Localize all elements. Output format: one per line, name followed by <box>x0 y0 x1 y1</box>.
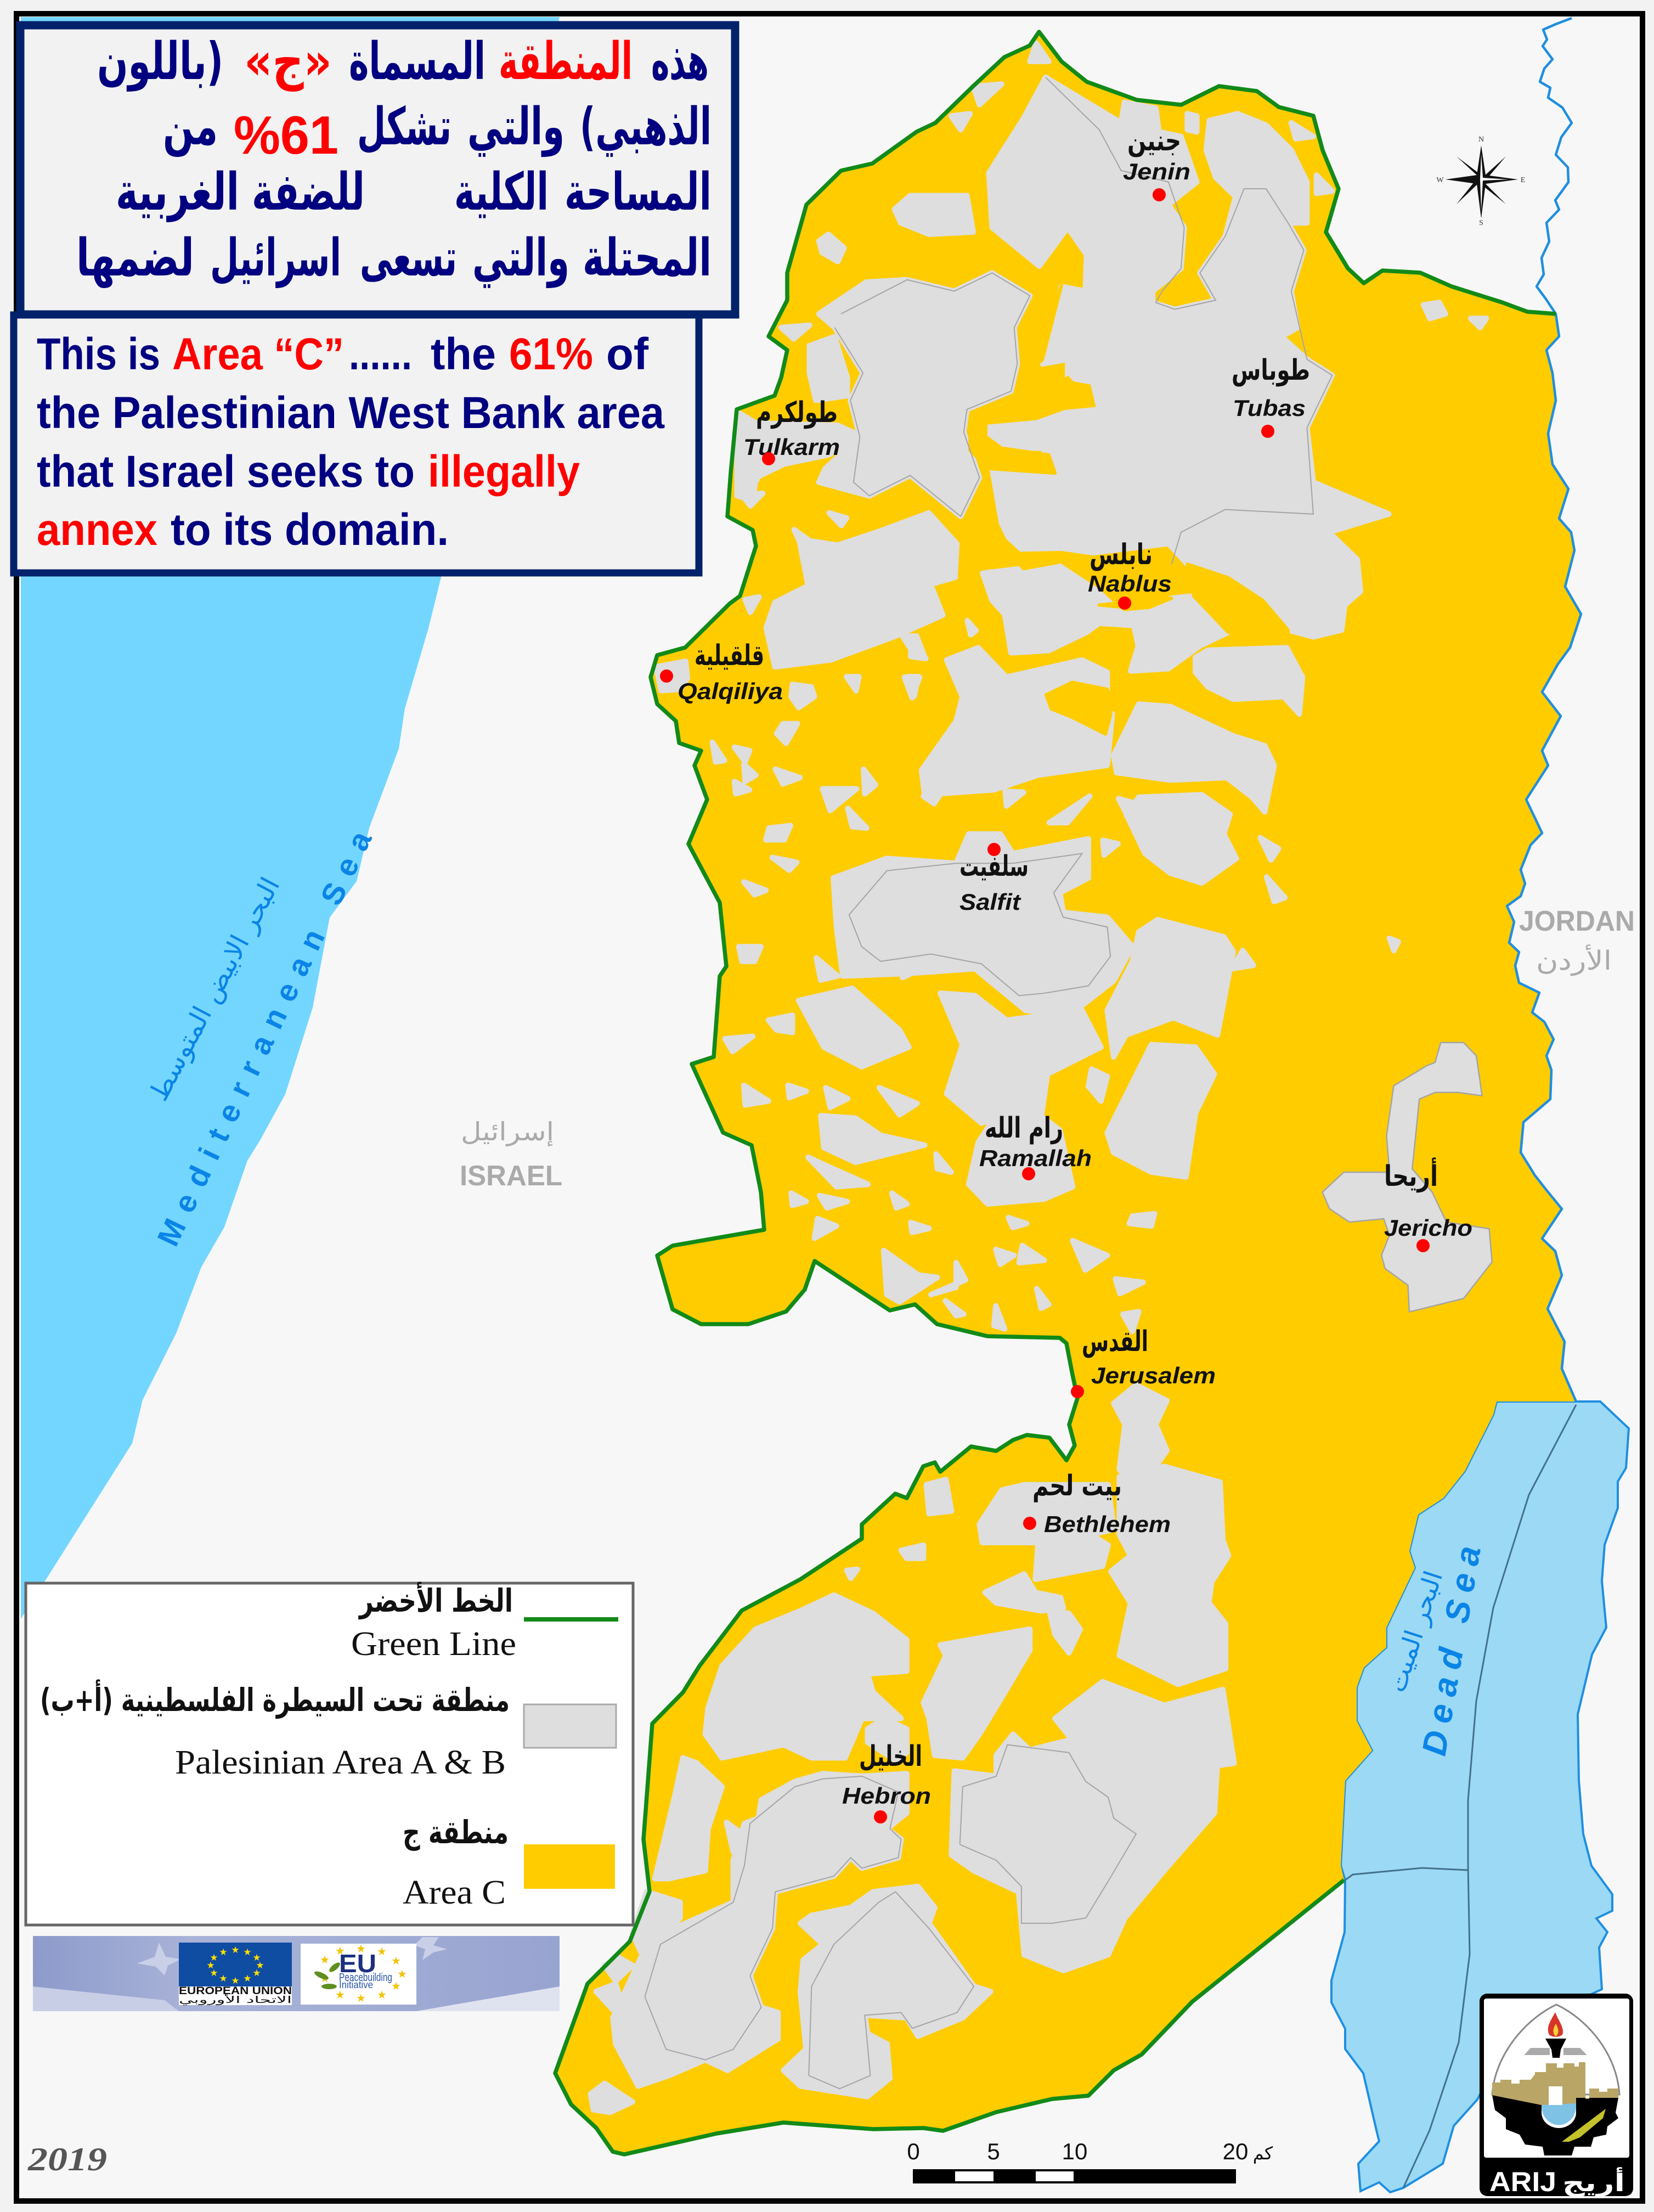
Arabic callout: الذهبي)‏ <box>580 97 712 157</box>
English callout: ...... <box>349 329 412 379</box>
Palestinian Area A and B, north-west <box>656 479 976 696</box>
compass rose: W <box>1436 176 1444 184</box>
EU flag: ★ <box>231 1945 240 1956</box>
label: Hebron <box>842 1740 931 1823</box>
Arabic callout: %61 <box>234 105 338 165</box>
label: Ramallah <box>979 1112 1092 1180</box>
label: Qalqiliya <box>660 639 783 705</box>
label: Jericho: Jericho <box>1384 1215 1472 1241</box>
Area C territory <box>555 32 1581 2154</box>
label: Dead Sea: Dead Sea <box>1415 1543 1488 1758</box>
scale bar: 20 <box>1223 2138 1248 2164</box>
EU flag: EUROPEAN UNION <box>179 1985 292 1997</box>
English callout: annex <box>37 505 157 555</box>
legend: Palestinian Area A and B <box>40 1679 616 1781</box>
Area C corridors through the north <box>970 286 1288 639</box>
scale bar <box>907 2138 1273 2183</box>
EU flag <box>179 1943 292 2006</box>
label: Bethlehem <box>1023 1470 1171 1537</box>
legend <box>26 1581 633 1925</box>
EU Peacebuilding Initiative logo: Initiative <box>339 1979 373 1990</box>
label: Israel <box>460 1117 562 1192</box>
scale bar: 0 <box>907 2138 920 2164</box>
Arabic callout: الكلية <box>454 162 549 222</box>
Dead Sea <box>1331 1402 1629 2192</box>
EU Peacebuilding Initiative logo: ★ <box>335 1988 345 2001</box>
EU flag: ★ <box>243 1973 252 1984</box>
Mediterranean Sea <box>21 17 560 1619</box>
EU Peacebuilding Initiative logo: ★ <box>377 1988 387 2001</box>
year: 2019 <box>27 2141 107 2177</box>
EU flag: ★ <box>252 1952 261 1963</box>
legend: Palestinian Area A and B: منطقة تحت السيطرة الفلسطينية (أ+ب)‏ <box>40 1679 510 1719</box>
EU flag: ★ <box>210 1952 218 1963</box>
compass rose: E <box>1521 176 1525 184</box>
English callout: the <box>431 329 496 379</box>
legend: Area C: Area C <box>403 1874 506 1911</box>
label: Salfit: Salfit <box>959 889 1021 915</box>
Arabic callout: ‏(باللون <box>97 32 223 92</box>
EU flag: ★ <box>210 1968 218 1979</box>
Arabic callout: والتي <box>472 228 569 288</box>
legend: Green Line <box>351 1581 618 1663</box>
EU flag: ★ <box>219 1973 228 1984</box>
legend: Area C: منطقة ج <box>403 1814 509 1851</box>
label: Mediterranean Sea: Mediterranean Sea <box>150 825 379 1251</box>
EU flag: ★ <box>231 1975 240 1986</box>
label: Qalqiliya: قلقيلية <box>695 639 764 672</box>
Arabic callout: تشكل <box>357 97 451 157</box>
label: Ramallah: رام الله <box>985 1112 1063 1145</box>
Arabic callout: الغربية <box>116 162 239 222</box>
compass rose: N <box>1478 136 1484 144</box>
label: Jerusalem: القدس <box>1082 1325 1148 1358</box>
English callout: Area “C” <box>172 329 344 379</box>
label: Bethlehem: بيت لحم <box>1032 1470 1122 1502</box>
Area C blob inside central enclave <box>1046 682 1111 734</box>
English callout: to its domain. <box>171 505 449 555</box>
scale bar: 5 <box>987 2138 1000 2164</box>
label: Salfit: سلفيت <box>959 850 1029 883</box>
EU Peacebuilding Initiative logo: ★ <box>391 1954 401 1967</box>
Arabic callout: والتي <box>467 97 564 157</box>
label: Tulkarm <box>743 396 840 465</box>
EU Peacebuilding Initiative logo: ★ <box>320 1953 330 1966</box>
EU Peacebuilding Initiative logo: ★ <box>356 1942 366 1955</box>
Arabic callout: المنطقة <box>499 32 633 92</box>
English callout: the Palestinian West Bank area <box>37 388 665 438</box>
label: Jericho: أريحا <box>1384 1157 1438 1193</box>
compass rose: S <box>1479 219 1483 227</box>
English callout: of <box>606 329 649 379</box>
EU Peacebuilding Initiative logo: EU <box>339 1949 376 1978</box>
ARIJ logo <box>1480 1994 1633 2197</box>
Arabic callout: المساحة <box>564 162 712 222</box>
label: Bethlehem: Bethlehem <box>1044 1511 1171 1537</box>
label: Israel: إسرائيل <box>461 1117 554 1147</box>
Jordan River <box>1507 18 1581 1402</box>
label: Hebron: الخليل <box>859 1740 922 1773</box>
label: Nablus: Nablus <box>1088 571 1172 596</box>
EU Peacebuilding Initiative logo: ★ <box>335 1944 345 1957</box>
label: Salfit <box>959 843 1029 915</box>
EU flag: ★ <box>219 1947 228 1958</box>
English callout: 61% <box>509 329 593 379</box>
label: Jenin: Jenin <box>1123 159 1190 184</box>
EU Peacebuilding Initiative logo: ★ <box>391 1979 401 1993</box>
Palestinian Area A and B, centre <box>713 637 1398 1331</box>
EU logos banner <box>33 1936 560 2011</box>
label: Jenin: جنين <box>1127 125 1181 157</box>
label: Mediterranean Sea: البحر الابيض المتوسط <box>143 873 286 1106</box>
label: Nablus <box>1088 538 1172 610</box>
label: Hebron: Hebron <box>842 1783 931 1809</box>
Palestinian Area A and B enclaves <box>590 43 1487 2112</box>
legend: Palestinian Area A and B: Palesinian Area A & B <box>175 1744 506 1781</box>
Arabic callout: هذه <box>651 32 709 92</box>
label: Jordan: JORDAN <box>1519 905 1635 937</box>
EU Peacebuilding Initiative logo: Peacebuilding <box>339 1972 392 1984</box>
English callout: illegally <box>428 447 580 497</box>
English callout <box>14 315 699 573</box>
Green Line <box>555 32 1556 2154</box>
scale bar: 10 <box>1062 2138 1087 2164</box>
EU Peacebuilding Initiative logo: ★ <box>356 1991 366 2005</box>
label: Tubas: Tubas <box>1233 395 1306 421</box>
label: Tubas: طوباس <box>1232 354 1310 387</box>
legend: Area C <box>403 1814 615 1911</box>
legend: Green Line: Green Line <box>351 1625 516 1663</box>
Arabic callout: للضفة <box>252 162 365 222</box>
label: Jordan: الأردن <box>1536 944 1612 976</box>
scale bar: كم <box>1253 2143 1273 2164</box>
label: Ramallah: Ramallah <box>979 1145 1092 1171</box>
EU flag: الاتحاد الأوروبي <box>179 1994 292 2006</box>
compass rose <box>1436 136 1525 227</box>
label: Tulkarm: Tulkarm <box>743 434 840 460</box>
EU Peacebuilding Initiative logo: ★ <box>377 1945 387 1958</box>
EU flag: ★ <box>256 1960 264 1971</box>
Arabic callout <box>20 25 735 314</box>
label: Jordan <box>1519 905 1635 976</box>
Palestinian Area A and B, south <box>590 1385 1234 2112</box>
zone boundary lines <box>645 77 1332 2089</box>
ARIJ logo: أريج <box>1562 2167 1625 2197</box>
Arabic callout: من <box>163 97 218 157</box>
label: Israel: ISRAEL <box>460 1160 562 1192</box>
EU Peacebuilding Initiative logo: ★ <box>397 1967 407 1980</box>
legend: Green Line: الخط الأخضر <box>358 1581 513 1620</box>
Arabic callout: «ج» <box>244 32 332 92</box>
Arabic callout: اسرائيل <box>210 228 341 288</box>
EU Peacebuilding Initiative logo: ★ <box>320 1972 330 1985</box>
label: Nablus: نابلس <box>1090 538 1153 571</box>
Arabic callout: تسعى <box>360 228 457 288</box>
label: Jericho <box>1384 1157 1472 1252</box>
label: Qalqiliya: Qalqiliya <box>678 678 783 705</box>
label: Jerusalem <box>1071 1325 1216 1398</box>
label: Dead Sea <box>1381 1543 1488 1758</box>
English callout: that Israel seeks to <box>37 447 415 497</box>
label: Jerusalem: Jerusalem <box>1091 1363 1216 1388</box>
Arabic callout: لضمها <box>76 228 194 288</box>
English callout: This is <box>37 329 160 379</box>
EU Peacebuilding Initiative logo <box>301 1942 416 2005</box>
Jericho enclave <box>1323 1043 1492 1312</box>
label: Dead Sea: البحر الميت <box>1381 1567 1449 1696</box>
EU flag: ★ <box>243 1947 252 1958</box>
ARIJ logo: ARIJ <box>1489 2166 1556 2197</box>
label: Tulkarm: طولكرم <box>756 396 838 429</box>
Arabic callout: المحتلة <box>583 228 712 288</box>
EU flag: ★ <box>252 1968 261 1979</box>
label: Jenin <box>1123 125 1190 201</box>
Palestinian Area A and B, north <box>737 43 1487 671</box>
Arabic callout: المسماة <box>349 32 486 92</box>
label: Tubas <box>1232 354 1310 438</box>
EU flag: ★ <box>206 1960 215 1971</box>
